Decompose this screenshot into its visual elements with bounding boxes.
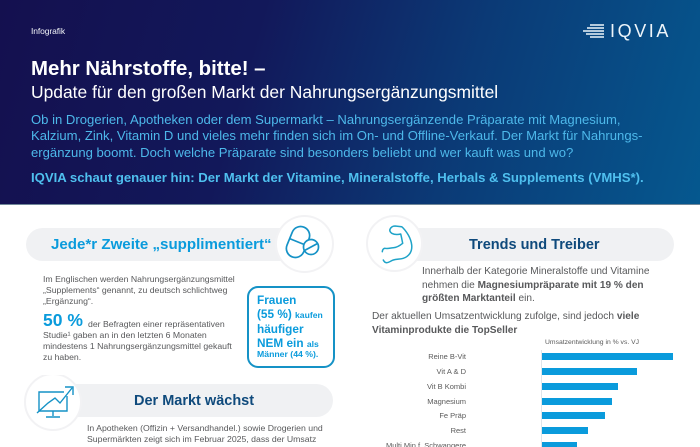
text: definition: Im Englischen werden Nahrungsergänzungsmittel bbox=[43, 274, 235, 284]
title: Mehr Nährstoffe, bitte! – bbox=[31, 58, 266, 80]
text: stat explanation: mindestens 1 Nahrungsergänzungsmittel gekauft bbox=[43, 341, 232, 351]
text: magnesium: größten Marktanteil ein. bbox=[422, 293, 535, 304]
text: topseller: Vitaminprodukte die TopSeller bbox=[372, 324, 517, 336]
callout: Frauen: (55 %) kaufen bbox=[257, 307, 323, 321]
callout: Frauen: Männer (44 %). bbox=[257, 349, 318, 359]
text: magnesium bbox=[422, 266, 649, 304]
panel: Der Markt wächst bbox=[24, 375, 333, 447]
intro text: Kalzium, Zink, Vitamin D und vieles mehr finden sich im On- und Offline-Verkauf. Der Markt für Nahrungs- bbox=[31, 128, 643, 143]
row: Fe Präp: Fe Präp bbox=[439, 411, 466, 420]
text: market: In Apotheken (Offizin + Versandhandel.) sowie Drogerien und bbox=[87, 423, 323, 433]
heading pill bbox=[26, 228, 296, 261]
label: Infografik: Infografik bbox=[31, 26, 65, 36]
icon: chart monitor bbox=[24, 373, 82, 431]
text: market: Supermärkten zeigt sich im Februar 2025, dass der Umsatz bbox=[87, 434, 316, 444]
stat: 50 %: 50 % bbox=[43, 310, 83, 330]
callout: Frauen: Frauen bbox=[257, 293, 296, 307]
intro text bbox=[31, 112, 643, 160]
icon: flexed arm bbox=[366, 215, 423, 272]
text: topseller bbox=[372, 311, 639, 336]
heading: Trends und Treiber bbox=[469, 237, 600, 253]
text: definition: „Ergänzung“. bbox=[43, 296, 93, 306]
text: stat explanation bbox=[43, 319, 232, 362]
heading pill bbox=[400, 228, 674, 261]
callout: Frauen: häufiger bbox=[257, 322, 304, 336]
logo: IQVIA: IQVIA bbox=[610, 21, 671, 41]
heading: Der Markt wächst bbox=[134, 393, 254, 409]
callout: Frauen bbox=[247, 286, 335, 368]
callout: Frauen: NEM ein als bbox=[257, 336, 319, 350]
row: Rest: Rest bbox=[451, 426, 466, 435]
icon: pills bbox=[275, 215, 334, 273]
panel: Trends und Treiber bbox=[366, 215, 674, 336]
intro highlight: IQVIA schaut genauer hin: Der Markt der Vitamine, Mineralstoffe, Herbals & Supplements (VMHS*). bbox=[31, 170, 644, 185]
text: definition bbox=[43, 274, 235, 306]
text: stat explanation: der Befragten einer repräsentativen bbox=[88, 319, 225, 329]
text: stat explanation: zu haben. bbox=[43, 352, 81, 362]
heading pill bbox=[50, 384, 333, 417]
bar chart bbox=[386, 339, 673, 447]
row: Magnesium: Magnesium bbox=[427, 397, 466, 406]
row: Reine B-Vit: Reine B-Vit bbox=[428, 352, 466, 361]
panel: Jede*r Zweite bbox=[26, 215, 335, 368]
subtitle: Update für den großen Markt der Nahrungsergänzungsmittel bbox=[31, 82, 498, 102]
row: Vit A & D: Vit A & D bbox=[437, 367, 466, 376]
text: magnesium: Innerhalb der Kategorie Mineralstoffe und Vitamine bbox=[422, 266, 649, 277]
row: Vit B Kombi: Vit B Kombi bbox=[427, 382, 466, 391]
text: magnesium: nehmen die Magnesiumpräparate mit 19 % den bbox=[422, 280, 644, 291]
intro text: Ob in Drogerien, Apotheken oder dem Supermarkt – Nahrungsergänzende Präparate mit Magnesium, bbox=[31, 112, 621, 127]
intro text: ergänzung boomt. Doch welche Präparate sind besonders beliebt und wer kauft was und wo? bbox=[31, 145, 573, 160]
text: definition: „Supplements“ genannt, zu deutsch schlichtweg bbox=[43, 285, 227, 295]
text: market bbox=[87, 423, 323, 447]
chart title: Umsatzentwicklung in % vs. VJ bbox=[545, 339, 639, 346]
logo: IQVIA bbox=[583, 21, 671, 41]
text: stat explanation: Studie¹ gaben an in den letzten 6 Monaten bbox=[43, 330, 207, 340]
header banner bbox=[0, 0, 700, 205]
text: topseller: Der aktuellen Umsatzentwicklung zufolge, sind jedoch viele bbox=[372, 311, 639, 322]
heading: Jede*r Zweite „supplimentiert“ bbox=[51, 236, 272, 253]
